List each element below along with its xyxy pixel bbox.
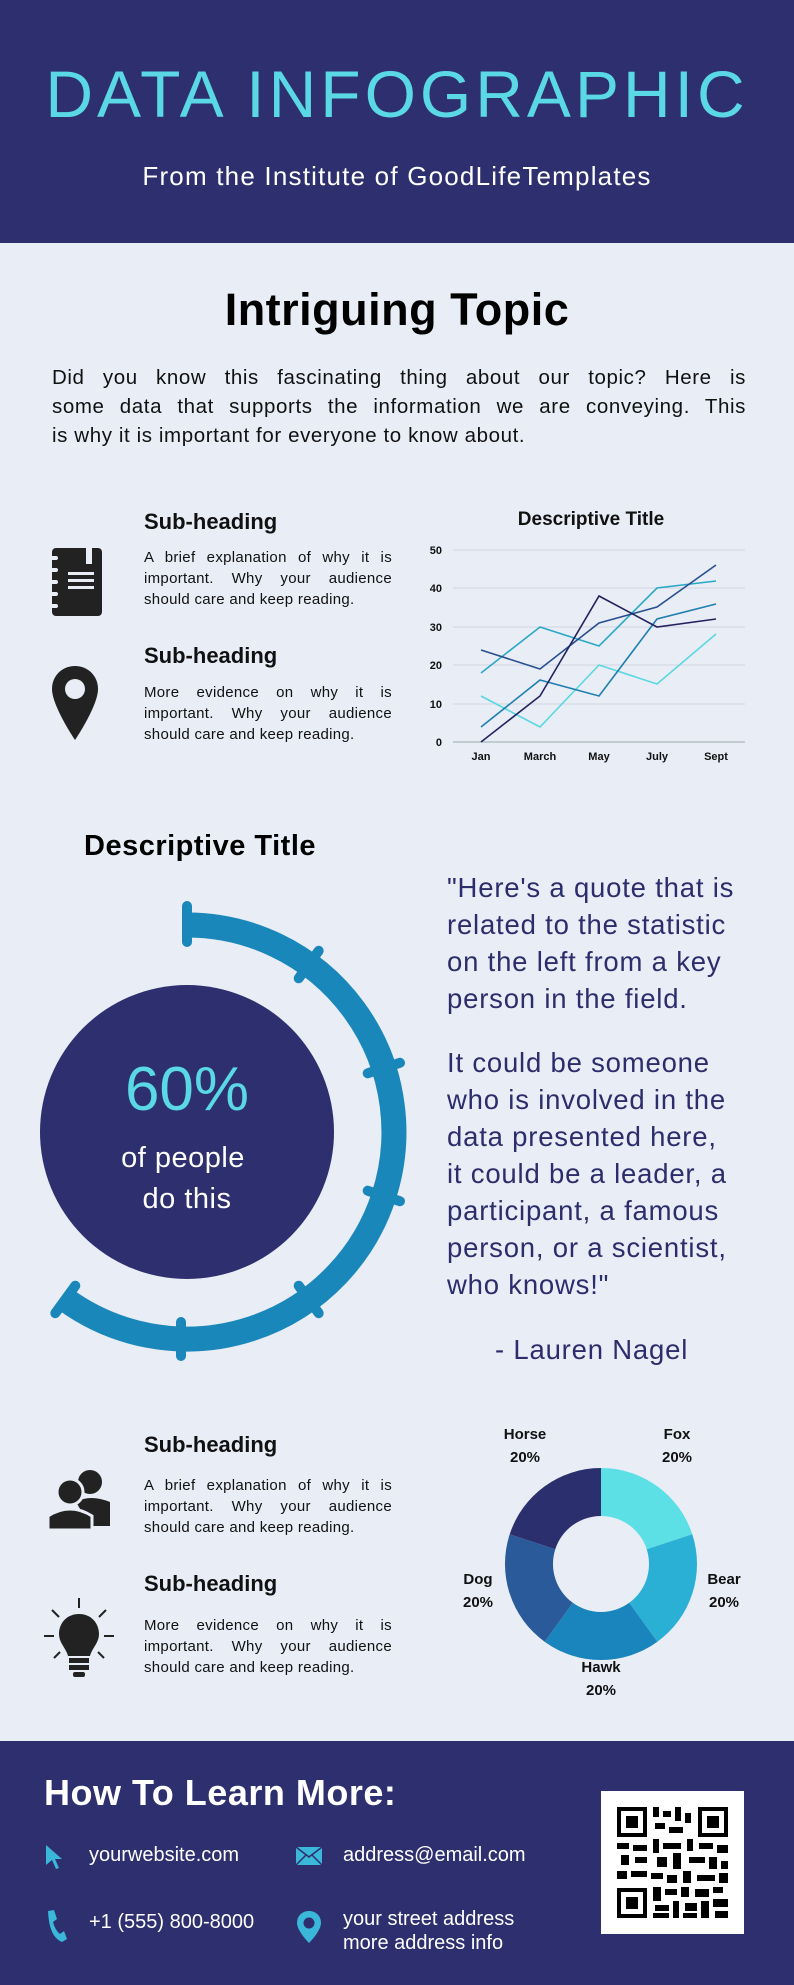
donut chart: 20% — [662, 1449, 692, 1466]
website: yourwebsite.com — [89, 1844, 239, 1866]
donut chart: Bear — [707, 1571, 741, 1588]
donut chart: 20% — [709, 1594, 739, 1611]
progress ring 60%: do this — [143, 1183, 231, 1215]
donut chart: 20% — [586, 1682, 616, 1699]
address — [343, 1908, 514, 1954]
icon: cursor — [46, 1845, 62, 1869]
sub-heading 4: Sub-heading — [144, 1571, 277, 1596]
quote — [447, 872, 734, 1300]
intro paragraph: Did you know this fascinating thing about our topic? Here is — [52, 366, 746, 389]
heading: Descriptive Title: Descriptive Title — [84, 830, 316, 862]
address: your street address — [343, 1908, 514, 1930]
donut chart: 20% — [463, 1594, 493, 1611]
icon: light bulb — [44, 1598, 114, 1677]
body text 1: A brief explanation of why it is important. Why your audience should care and keep reading. — [144, 549, 392, 608]
icon: notebook — [52, 548, 102, 616]
phone number: +1 (555) 800-8000 — [89, 1911, 254, 1933]
icon: envelope — [296, 1847, 322, 1865]
quote author: - Lauren Nagel — [495, 1334, 688, 1365]
donut chart: Dog — [463, 1571, 493, 1588]
quote: person in the field. It could be someone — [447, 983, 710, 1078]
donut chart: Horse — [504, 1426, 546, 1443]
quote: on the left from a key — [447, 946, 721, 977]
address: more address info — [343, 1932, 503, 1954]
quote: who is involved in the — [447, 1084, 726, 1115]
intro paragraph — [52, 366, 746, 447]
sub-heading 2: Sub-heading — [144, 643, 277, 668]
sub-heading 3: Sub-heading — [144, 1432, 277, 1457]
intro paragraph: is why it is important for everyone to know about. — [52, 424, 525, 447]
progress ring 60%: 60% — [125, 1055, 249, 1124]
line chart: May — [588, 751, 611, 763]
subtitle: From the Institute of GoodLifeTemplates — [142, 161, 652, 191]
line chart: 40 — [430, 583, 442, 595]
body text 3: A brief explanation of why it is important. Why your audience should care and keep reading. — [144, 1477, 392, 1536]
line chart: 20 — [430, 660, 442, 672]
donut chart — [463, 1426, 741, 1699]
icon: map pin — [52, 666, 98, 740]
donut chart: Fox — [664, 1426, 691, 1443]
line chart: 50 — [430, 545, 442, 557]
donut chart: Hawk — [581, 1659, 621, 1676]
quote: it could be a leader, a — [447, 1158, 727, 1189]
donut chart: 20% — [510, 1449, 540, 1466]
quote: person, or a scientist, — [447, 1232, 727, 1263]
footer heading: How To Learn More: — [44, 1772, 396, 1813]
quote: participant, a famous — [447, 1195, 719, 1226]
quote: "Here's a quote that is — [447, 872, 734, 903]
line chart: July — [646, 751, 669, 763]
line chart: 0 — [436, 737, 442, 749]
icon: location pin — [297, 1911, 321, 1943]
sub-heading 1: Sub-heading — [144, 509, 277, 534]
line chart: Jan — [472, 751, 491, 763]
line chart: Descriptive Title — [518, 509, 664, 530]
line chart: 30 — [430, 622, 442, 634]
intro paragraph: some data that supports the information we are conveying. This — [52, 395, 746, 418]
line chart: 10 — [430, 699, 442, 711]
icon: phone — [48, 1910, 67, 1942]
title: DATA INFOGRAPHIC — [45, 57, 749, 131]
email: address@email.com — [343, 1844, 526, 1866]
quote: related to the statistic — [447, 909, 726, 940]
quote: who knows!" — [447, 1269, 609, 1300]
heading: Intriguing Topic: Intriguing Topic — [225, 284, 569, 335]
header band — [0, 0, 794, 243]
body text 4: More evidence on why it is important. Why your audience should care and keep reading. — [144, 1617, 392, 1676]
line chart — [430, 509, 745, 763]
progress ring 60% — [40, 901, 406, 1361]
line chart: Sept — [704, 751, 728, 763]
body text 2: More evidence on why it is important. Why your audience should care and keep reading. — [144, 684, 392, 743]
footer panel — [0, 1741, 794, 1985]
icon: people — [50, 1470, 110, 1528]
QR code — [601, 1791, 744, 1934]
line chart: March — [524, 751, 556, 763]
quote: data presented here, — [447, 1121, 717, 1152]
progress ring 60%: of people — [121, 1142, 245, 1174]
